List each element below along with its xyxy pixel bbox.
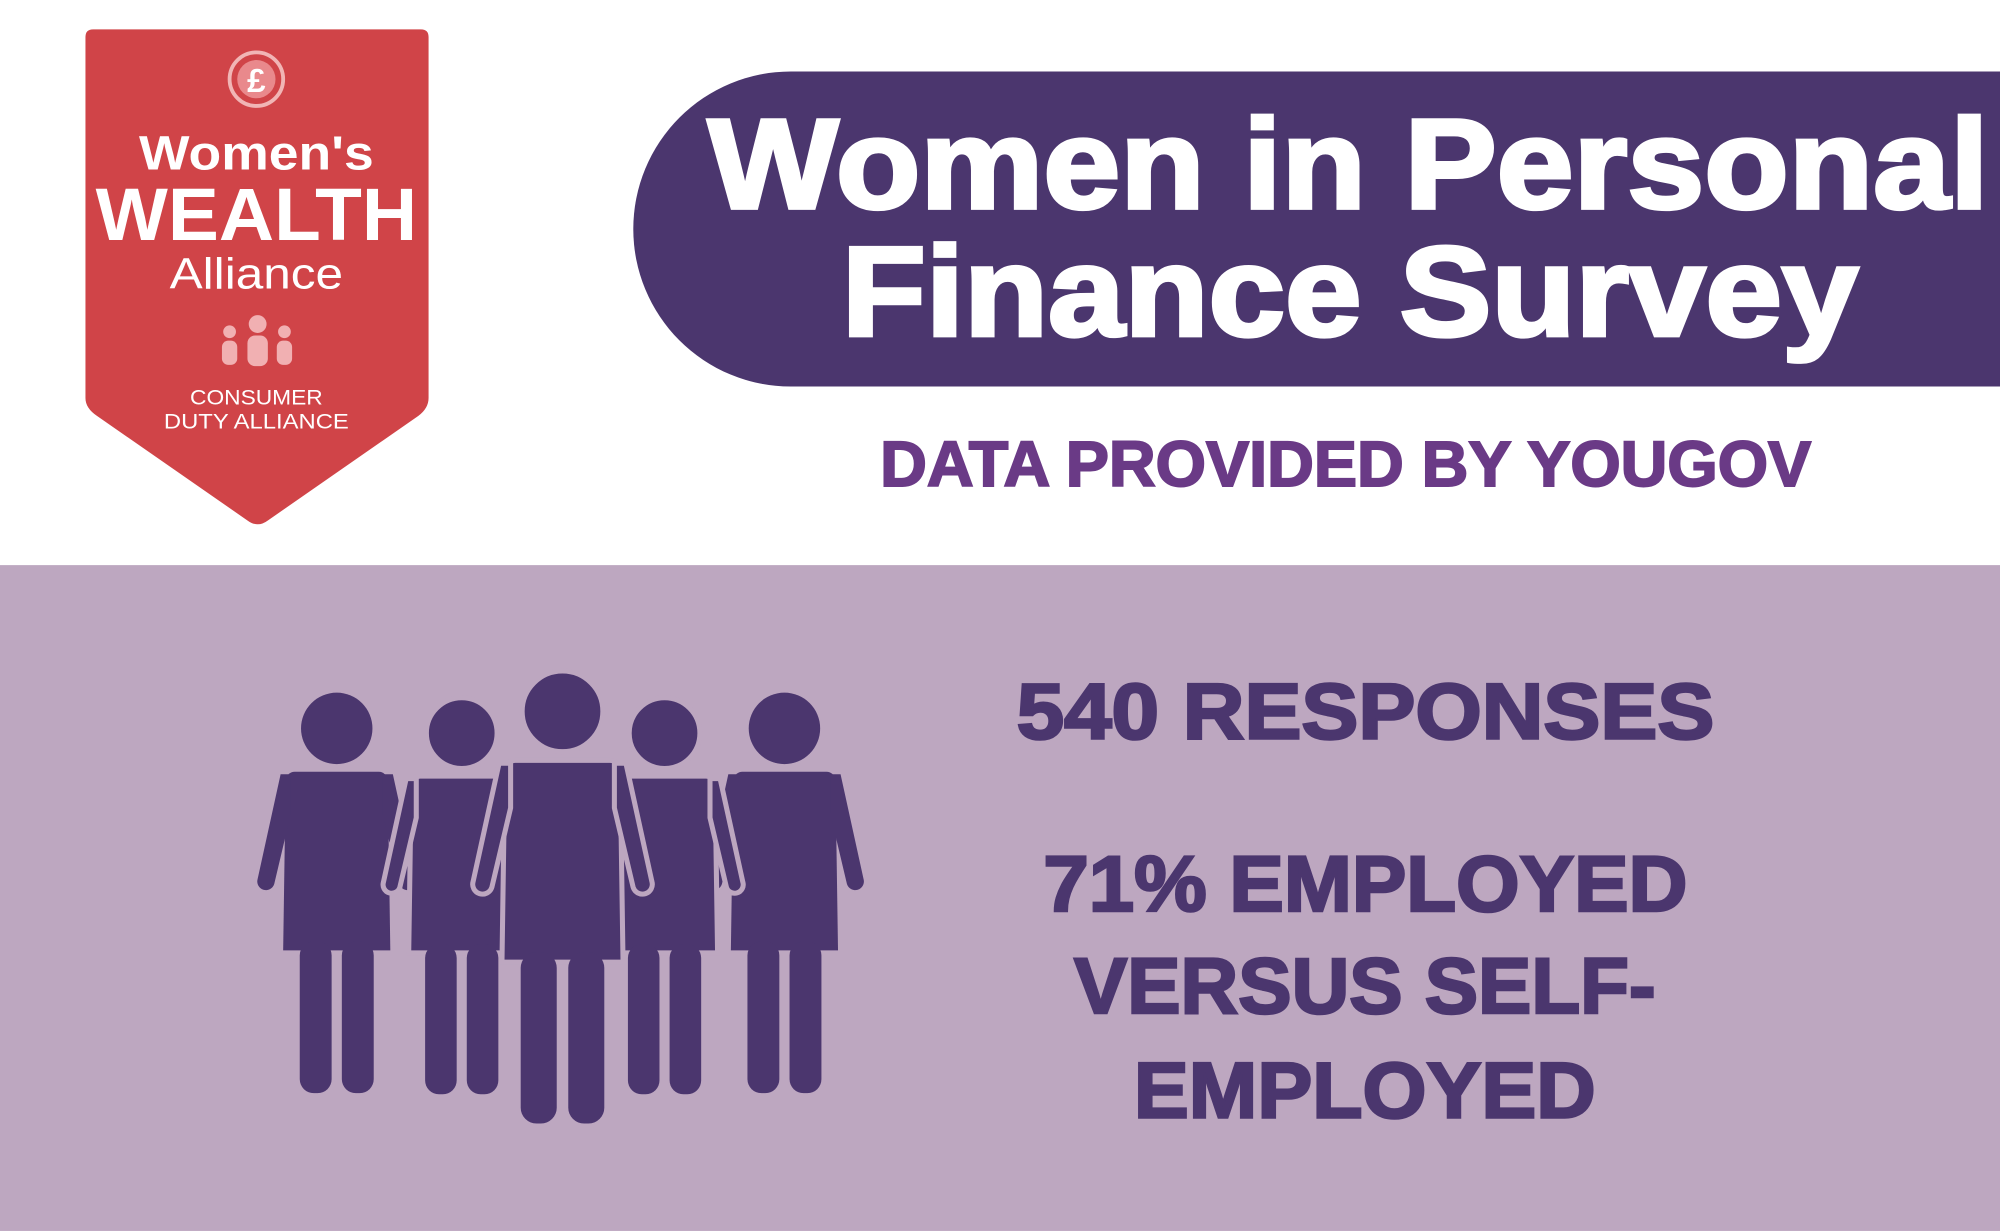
logo text: WEALTH — [96, 173, 417, 256]
background: lower panel — [0, 565, 2000, 1231]
icon: pound coin: £ — [247, 63, 266, 100]
stat: employment: EMPLOYED — [1134, 1045, 1596, 1134]
stat: employment — [1043, 839, 1688, 1134]
stat: responses: 540 RESPONSES — [1017, 667, 1714, 756]
icon: pound coin — [230, 52, 283, 106]
subtitle: DATA PROVIDED BY YOUGOV — [880, 428, 1812, 500]
stat: employment: VERSUS SELF- — [1074, 941, 1656, 1030]
title banner: Finance Survey — [842, 222, 1858, 364]
stat: employment: 71% EMPLOYED — [1043, 839, 1687, 928]
logo text: Alliance — [170, 250, 343, 298]
title banner — [633, 71, 2000, 387]
logo badge — [85, 29, 429, 524]
logo text: CONSUMER — [190, 384, 323, 409]
logo text — [96, 127, 417, 434]
logo text: DUTY ALLIANCE — [164, 409, 349, 434]
icon: group of women — [257, 671, 864, 1124]
title banner: Women in Personal — [708, 94, 1989, 236]
logo text: Women's — [139, 127, 374, 181]
icon: people — [222, 315, 292, 366]
